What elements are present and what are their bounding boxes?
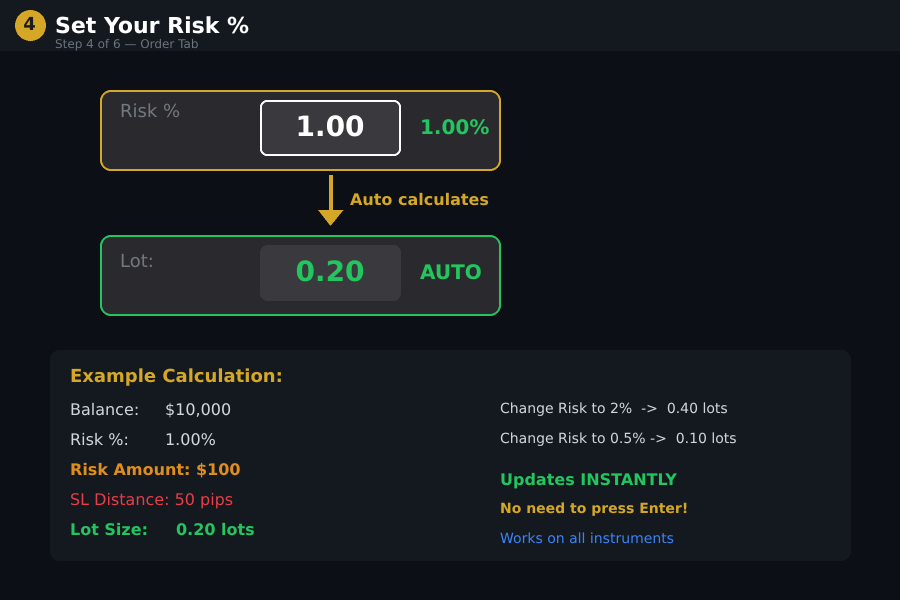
header bar (0, 0, 900, 51)
risk amount row: Risk Amount: $100 (70, 460, 241, 479)
arrow label: Auto calculates (350, 190, 489, 209)
icon: step number badge (15, 10, 46, 41)
example heading: Example Calculation: (70, 366, 283, 387)
lot value field (260, 245, 401, 301)
panel: example calculation (50, 350, 851, 561)
balance row: Balance: (70, 400, 139, 419)
risk percent value: 1.00% (420, 115, 489, 139)
scenario: 0.5 percent: Change Risk to 0.5% -> 0.10 lots (500, 431, 737, 447)
risk percent row: 1.00% (165, 430, 216, 449)
enter note: No need to press Enter! (500, 501, 688, 517)
scenario: 2 percent: Change Risk to 2% -> 0.40 lots (500, 401, 728, 417)
auto tag: AUTO (420, 260, 482, 284)
panel: lot output (101, 236, 500, 315)
risk input field: 1.00 (295, 110, 365, 143)
lot size row: 0.20 lots (176, 520, 255, 539)
balance row: $10,000 (165, 400, 231, 419)
title: Set Your Risk % (55, 14, 249, 39)
subtitle: Step 4 of 6 — Order Tab (55, 37, 198, 51)
stop loss distance row: SL Distance: 50 pips (70, 490, 233, 509)
arrow: risk to lot (318, 175, 344, 226)
updates note: Updates INSTANTLY (500, 470, 677, 489)
lot size row: Lot Size: (70, 520, 148, 539)
icon: step number badge: 4 (23, 14, 36, 35)
risk label: Risk % (120, 101, 180, 122)
instruments note: Works on all instruments (500, 531, 674, 547)
lot value field: 0.20 (295, 255, 365, 288)
risk percent row: Risk %: (70, 430, 129, 449)
risk input field (261, 101, 400, 155)
panel: risk input (101, 91, 500, 170)
lot label: Lot: (120, 251, 154, 272)
